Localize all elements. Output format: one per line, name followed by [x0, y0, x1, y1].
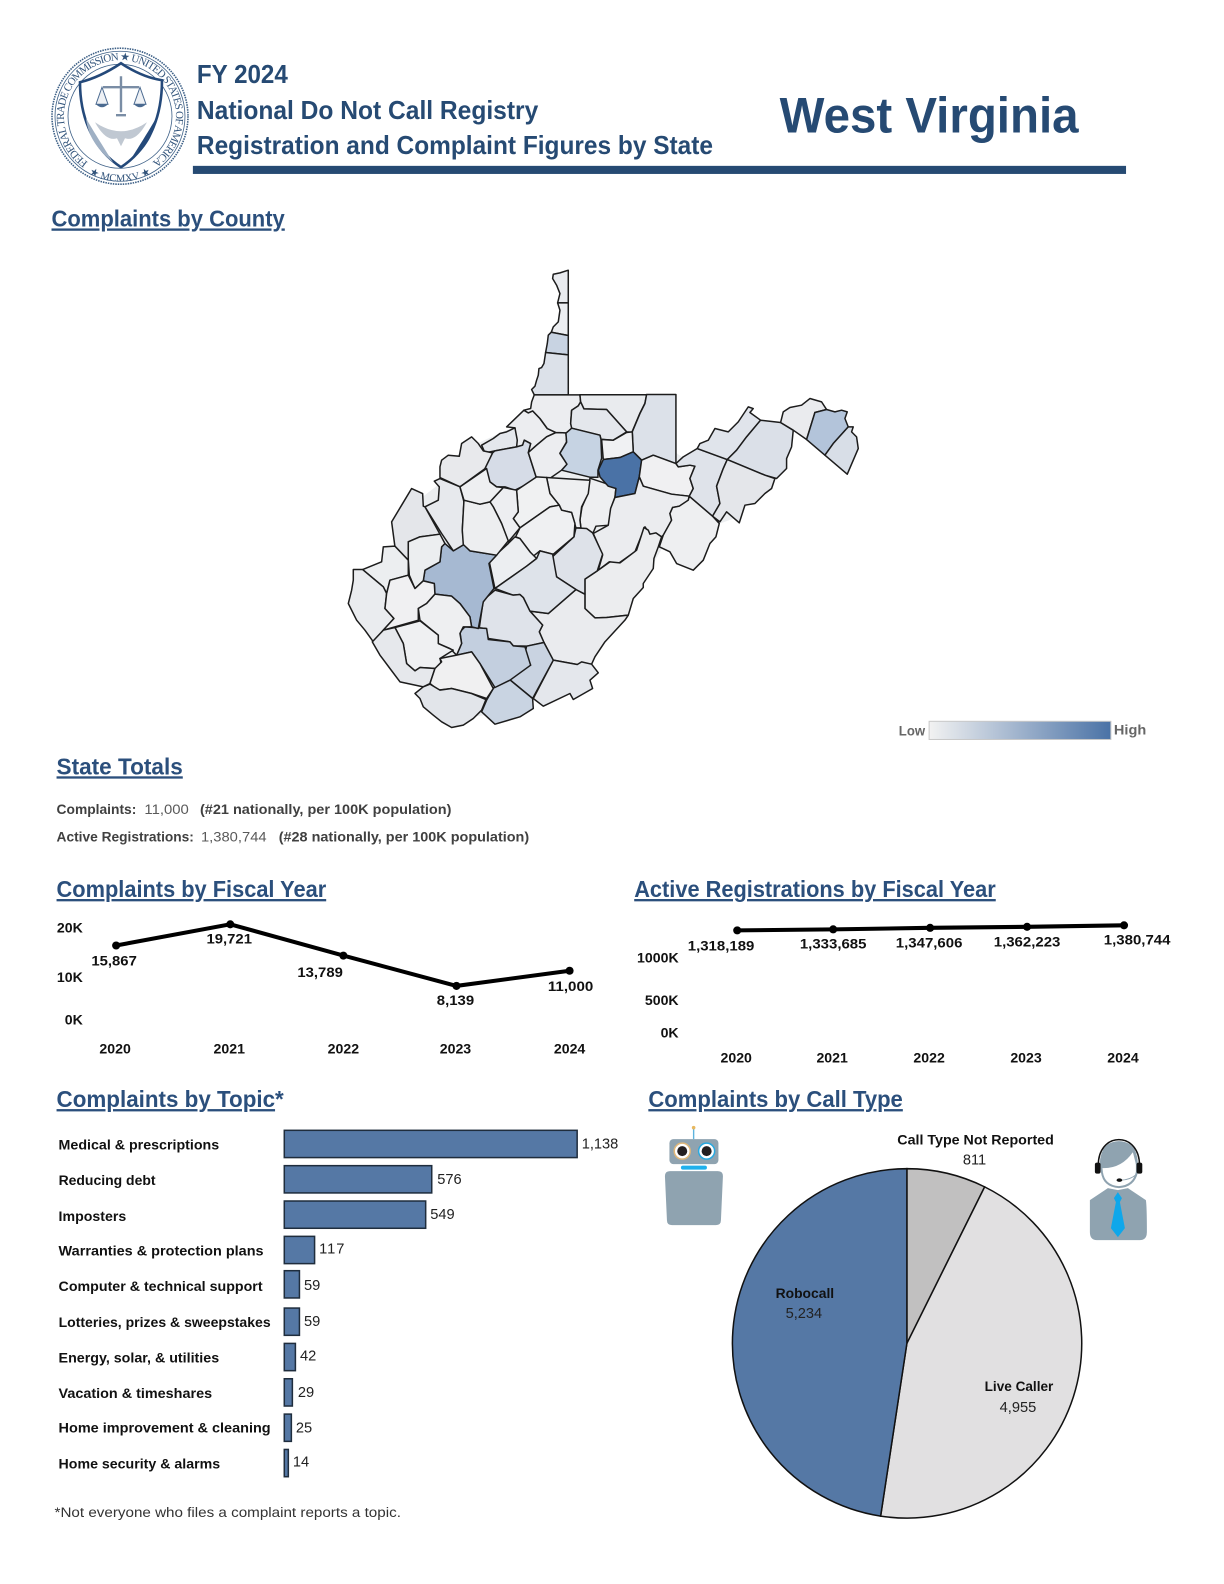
line chart: complaints by fiscal year: 2023	[440, 1041, 471, 1057]
line chart: complaints by fiscal year: 20K	[57, 919, 84, 935]
line chart: active registrations by fiscal year: 2024	[1107, 1050, 1139, 1066]
map legend: High	[1114, 721, 1146, 737]
pie labels	[776, 1131, 1054, 1416]
bar chart: complaints by topic: Imposters	[59, 1208, 126, 1224]
line chart: complaints by fiscal year: 13,789	[297, 964, 343, 980]
bar chart: complaints by topic: Home improvement & cleaning	[59, 1419, 271, 1435]
state totals text: (#28 nationally, per 100K population)	[279, 828, 529, 844]
bar chart: complaints by topic: 549	[430, 1207, 455, 1223]
line chart: active registrations by fiscal year: 1,333,685	[800, 936, 867, 952]
line chart: complaints by fiscal year: 10K	[57, 969, 84, 985]
bar chart: complaints by topic: Reducing debt	[59, 1172, 156, 1188]
line chart: complaints by fiscal year: 15,867	[91, 953, 137, 969]
icon: robot	[665, 1126, 723, 1225]
header: title lines: National Do Not Call Registry	[197, 95, 539, 125]
line chart: active registrations by fiscal year: 1,347,606	[896, 935, 963, 951]
line chart: active registrations by fiscal year: 1,380,744	[1104, 931, 1171, 947]
state totals text: 11,000	[144, 801, 189, 817]
line chart: complaints by fiscal year: 2022	[328, 1041, 359, 1057]
header: title lines	[197, 59, 713, 160]
line chart: complaints by fiscal year: 11,000	[548, 978, 593, 994]
line chart: complaints by fiscal year: 19,721	[207, 930, 252, 946]
state totals text: (#21 nationally, per 100K population)	[200, 801, 451, 817]
bar chart: complaints by topic: Lotteries, prizes & sweepstakes	[59, 1314, 271, 1330]
bar chart: complaints by topic: Medical & prescriptions	[59, 1137, 219, 1153]
heading: complaints by topic: Complaints by Topic*	[57, 1086, 285, 1112]
county choropleth map	[348, 270, 858, 727]
bar chart: complaints by topic: Vacation & timeshares	[59, 1385, 212, 1401]
state name: West Virginia	[780, 87, 1079, 144]
bar chart: complaints by topic: 59	[304, 1278, 320, 1294]
line chart: active registrations by fiscal year: 2021	[816, 1050, 848, 1066]
pie labels: 4,955	[1000, 1400, 1036, 1416]
bar chart: complaints by topic: 576	[437, 1172, 462, 1188]
icon: live call agent	[1090, 1140, 1147, 1240]
bar chart: complaints by topic: 1,138	[582, 1136, 618, 1152]
state totals text: Complaints:	[57, 801, 136, 817]
heading: complaints by call type: Complaints by Call Type	[648, 1086, 903, 1112]
FTC seal: ★ MCMXV ★	[91, 168, 149, 182]
pie labels: Live Caller	[985, 1378, 1054, 1394]
line chart: complaints by fiscal year: 8,139	[437, 992, 474, 1008]
pie labels: Robocall	[776, 1285, 834, 1301]
line chart: active registrations by fiscal year: 1,318,189	[688, 938, 755, 954]
bar chart: complaints by topic	[59, 1130, 618, 1477]
line chart: complaints by fiscal year: 2021	[214, 1041, 245, 1057]
line chart: complaints by fiscal year: 0K	[65, 1011, 84, 1027]
line chart: complaints by fiscal year: 2020	[99, 1041, 131, 1057]
footnote: *Not everyone who files a complaint reports a topic.	[55, 1504, 401, 1520]
line chart: active registrations by fiscal year: 2023	[1010, 1050, 1042, 1066]
bar chart: complaints by topic: 14	[293, 1455, 309, 1471]
pie labels: 5,234	[786, 1306, 822, 1322]
heading: complaints by county: Complaints by County	[52, 205, 285, 231]
line chart: complaints by fiscal year	[57, 919, 593, 1057]
bar chart: complaints by topic: 117	[319, 1242, 344, 1258]
line chart: active registrations by fiscal year: 1,362,223	[994, 934, 1061, 950]
bar chart: complaints by topic: Energy, solar, & utilities	[59, 1350, 219, 1366]
line chart: active registrations by fiscal year: 2022	[913, 1050, 945, 1066]
bar chart: complaints by topic: Warranties & protection plans	[59, 1243, 264, 1259]
heading: complaints by fiscal year: Complaints by Fiscal Year	[57, 876, 326, 902]
line chart: complaints by fiscal year: 2024	[554, 1041, 585, 1057]
pie labels: 811	[963, 1153, 986, 1169]
bar chart: complaints by topic: 59	[304, 1314, 320, 1330]
bar chart: complaints by topic: Home security & alarms	[59, 1456, 220, 1472]
line chart: active registrations by fiscal year: 1000K	[637, 950, 679, 966]
state totals text	[57, 801, 529, 844]
line chart: active registrations by fiscal year: 2020	[720, 1050, 752, 1066]
header: title lines: Registration and Complaint Figures by State	[197, 130, 713, 160]
map legend: Low	[899, 722, 926, 738]
map legend	[899, 721, 1146, 739]
bar chart: complaints by topic: 25	[296, 1420, 312, 1436]
pie chart: complaints by call type	[732, 1169, 1082, 1518]
bar chart: complaints by topic: 42	[300, 1349, 316, 1365]
heading: active registrations by fiscal year: Active Registrations by Fiscal Year	[634, 876, 996, 902]
pie labels: Call Type Not Reported	[897, 1131, 1054, 1147]
heading: state totals: State Totals	[57, 753, 183, 779]
bar chart: complaints by topic: Computer & technical support	[59, 1278, 263, 1294]
line chart: active registrations by fiscal year: 0K	[661, 1024, 679, 1040]
state totals text: Active Registrations:	[57, 828, 194, 844]
line chart: active registrations by fiscal year: 500K	[645, 992, 679, 1008]
header: title lines: FY 2024	[197, 59, 288, 89]
state totals text: 1,380,744	[201, 828, 267, 844]
header rule	[193, 166, 1126, 174]
line chart: active registrations by fiscal year	[637, 921, 1171, 1066]
bar chart: complaints by topic: 29	[298, 1385, 314, 1401]
FTC seal: FEDERAL TRADE COMMISSION ★ UNITED STATES OF AMERICA	[56, 52, 184, 168]
